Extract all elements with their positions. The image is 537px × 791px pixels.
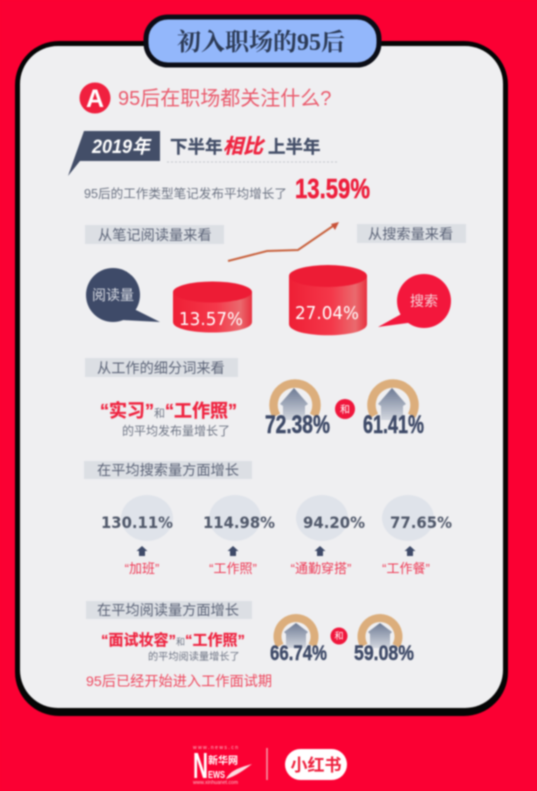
stat: 72.38%: 72.38% [265, 411, 330, 439]
icon: A badge [80, 82, 110, 114]
search stat: work meals [382, 495, 452, 576]
year banner [68, 131, 338, 176]
stat: 72.38% [265, 383, 330, 439]
summary stat: 95后的工作类型笔记发布平均增长了 [84, 186, 287, 201]
label: search [357, 224, 466, 243]
conclusion text: 95后已经开始进入工作面试期 [86, 674, 272, 690]
cylinder: 27.04%: 27.04% [295, 303, 359, 324]
badge: and: 和 [334, 631, 344, 641]
title text: 初入职场的95后 [177, 29, 345, 56]
callout: internship and work photo [100, 400, 237, 438]
badge: and [330, 628, 348, 644]
summary stat [84, 173, 370, 204]
search stat: overtime: 130.11% [101, 513, 173, 532]
logo: Xinhua News: EWS [208, 770, 225, 781]
label: note reads: 从笔记阅读量来看 [98, 227, 212, 244]
icon: A badge: A [86, 85, 104, 113]
search stat: work photo: 114.98% [203, 513, 275, 532]
heading text: 95后在职场都关注什么? [118, 87, 331, 110]
section heading A [80, 82, 331, 114]
search stat: work meals: “工作餐” [382, 561, 430, 576]
speech bubble: reads: 阅读量 [92, 287, 134, 303]
speech bubble: search [378, 274, 451, 328]
logo: Xinhua News: 新华网 [208, 754, 238, 767]
callout: internship and work photo: “实习”和“工作照” [100, 400, 237, 421]
year tag: 2019年 [91, 136, 152, 158]
badge: and [335, 399, 355, 419]
comparison headline: 相比 [223, 136, 266, 158]
panel: main card [15, 41, 508, 716]
cylinder: 27.04% [289, 265, 367, 335]
comparison headline: 上半年 [268, 137, 320, 157]
search stat: overtime: “加班” [125, 561, 159, 576]
arrow: rising trend [228, 222, 339, 261]
search stat: work meals: 77.65% [390, 513, 452, 532]
stat: 59.08%: 59.08% [354, 642, 414, 665]
stat: 66.74% [270, 618, 327, 665]
callout: interview makeup and work photo: “面试妆容”和“工作照” [101, 631, 245, 649]
label: search: 从搜索量来看 [368, 226, 453, 243]
key number: 13.59% [295, 173, 370, 204]
stat: 61.41%: 61.41% [363, 411, 424, 439]
year tag [68, 131, 160, 176]
label: average search: 在平均搜索量方面增长 [97, 462, 239, 479]
search stat: commute outfits: 94.20% [303, 513, 365, 532]
badge: and: 和 [340, 404, 350, 416]
logo: Xiaohongshu: 小红书 [290, 756, 342, 775]
speech bubble: reads [86, 268, 160, 322]
callout: interview makeup and work photo: 的平均阅读量增长了 [148, 650, 240, 663]
cylinder: 13.57%: 13.57% [179, 309, 243, 330]
callout: interview makeup and work photo [101, 631, 245, 663]
search stat: work photo: “工作照” [209, 561, 257, 576]
label: average reads: 在平均阅读量方面增长 [97, 602, 239, 619]
stat: 66.74%: 66.74% [270, 642, 327, 665]
logo: Xinhua News [193, 745, 252, 786]
comparison headline: 下半年 [170, 137, 222, 157]
search stat: overtime [101, 495, 173, 576]
cylinder: 13.57% [173, 282, 252, 332]
label: work subterms: 从工作的细分词来看 [97, 361, 225, 377]
label: note reads [85, 225, 224, 244]
search stat: commute outfits [291, 495, 365, 576]
stat: 59.08% [354, 618, 414, 665]
logo: Xinhua News: N [193, 745, 208, 786]
logo: Xinhua News: www.news.cn [193, 745, 238, 751]
logo: Xinhua News: www.xinhuanet.com [193, 780, 238, 786]
stat: 61.41% [363, 383, 424, 439]
callout: internship and work photo: 的平均发布量增长了 [122, 423, 230, 438]
speech bubble: search: 搜索 [410, 293, 438, 309]
title pill [146, 17, 379, 65]
search stat: work photo [203, 495, 275, 576]
logo: Xiaohongshu [285, 749, 347, 780]
search stat: commute outfits: “通勤穿搭” [291, 561, 351, 576]
